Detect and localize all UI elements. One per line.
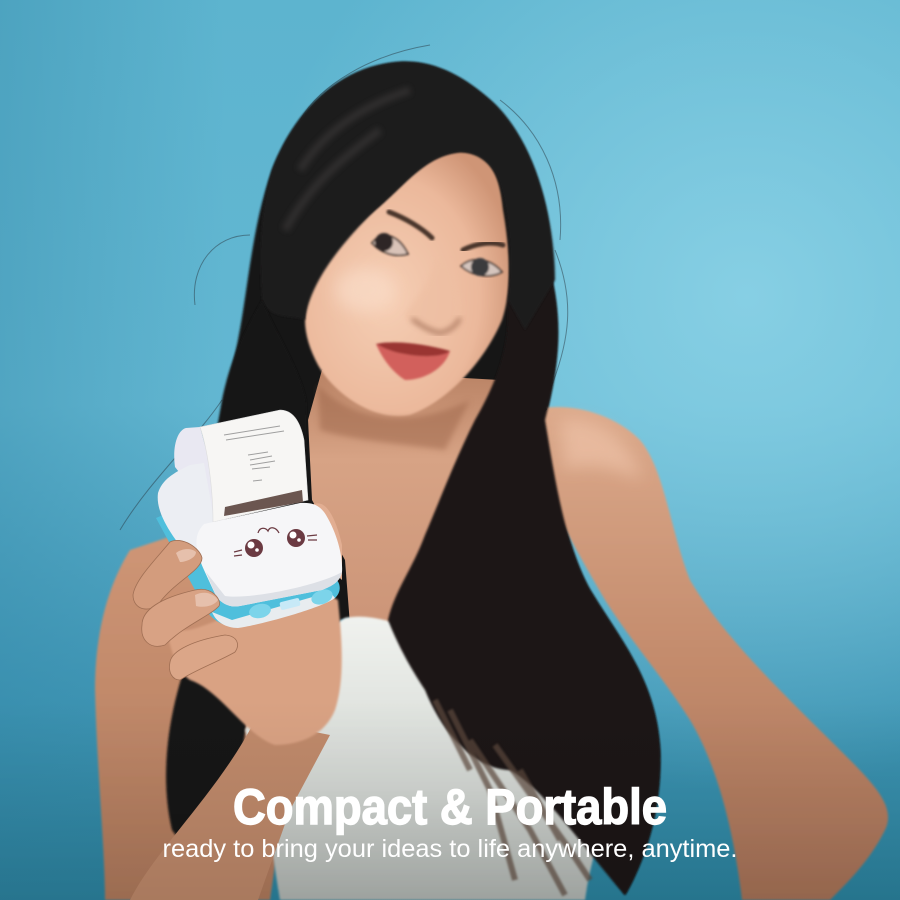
dark print slot band: [224, 490, 303, 516]
face: [305, 152, 509, 416]
forearm over body: [130, 720, 330, 900]
flyaway hair wisps: [120, 45, 568, 530]
hair behind body: [164, 62, 660, 895]
hair left long part over hand side: [180, 300, 307, 520]
palm and hand: [165, 590, 342, 745]
front lid: [196, 503, 342, 607]
hair strands between arm and dress: [166, 640, 250, 868]
title: Compact & Portable: [233, 779, 667, 835]
kawaii eyes: [234, 528, 317, 557]
arm highlight: [560, 419, 642, 480]
shoulder strap: [534, 408, 546, 490]
neck and chest: [308, 370, 500, 625]
subtitle: ready to bring your ideas to life anywhere, anytime.: [162, 835, 737, 863]
neck shadow: [318, 385, 470, 450]
bottom caption darkening: [0, 700, 900, 900]
USB detail: [279, 598, 301, 610]
receipt paper: [200, 410, 308, 522]
cheek highlight: [335, 268, 395, 312]
fingers: [133, 540, 238, 680]
right eyebrow: [463, 243, 503, 250]
lid shading: [206, 572, 342, 607]
paper roll inside: [174, 427, 225, 522]
hair front around face: [260, 62, 555, 330]
dress: [245, 617, 633, 900]
hair sheen: [285, 90, 410, 230]
thumb behind printer: [312, 503, 342, 580]
left eyebrow: [389, 212, 432, 238]
receipt text: [224, 426, 284, 481]
nose: [405, 260, 460, 329]
right shoulder and arm: [525, 407, 888, 900]
left upper arm: [95, 530, 290, 900]
blue base: [156, 512, 340, 625]
rear body bump: [158, 463, 215, 565]
right eye: [461, 258, 502, 276]
feet: [248, 602, 272, 620]
lips: [376, 342, 450, 380]
printer held in hand: [133, 410, 342, 745]
white bottom edge: [212, 592, 335, 628]
left eye: [372, 233, 408, 255]
lighter strands over dress: [435, 700, 590, 895]
hair front fall over chest: [388, 253, 660, 895]
